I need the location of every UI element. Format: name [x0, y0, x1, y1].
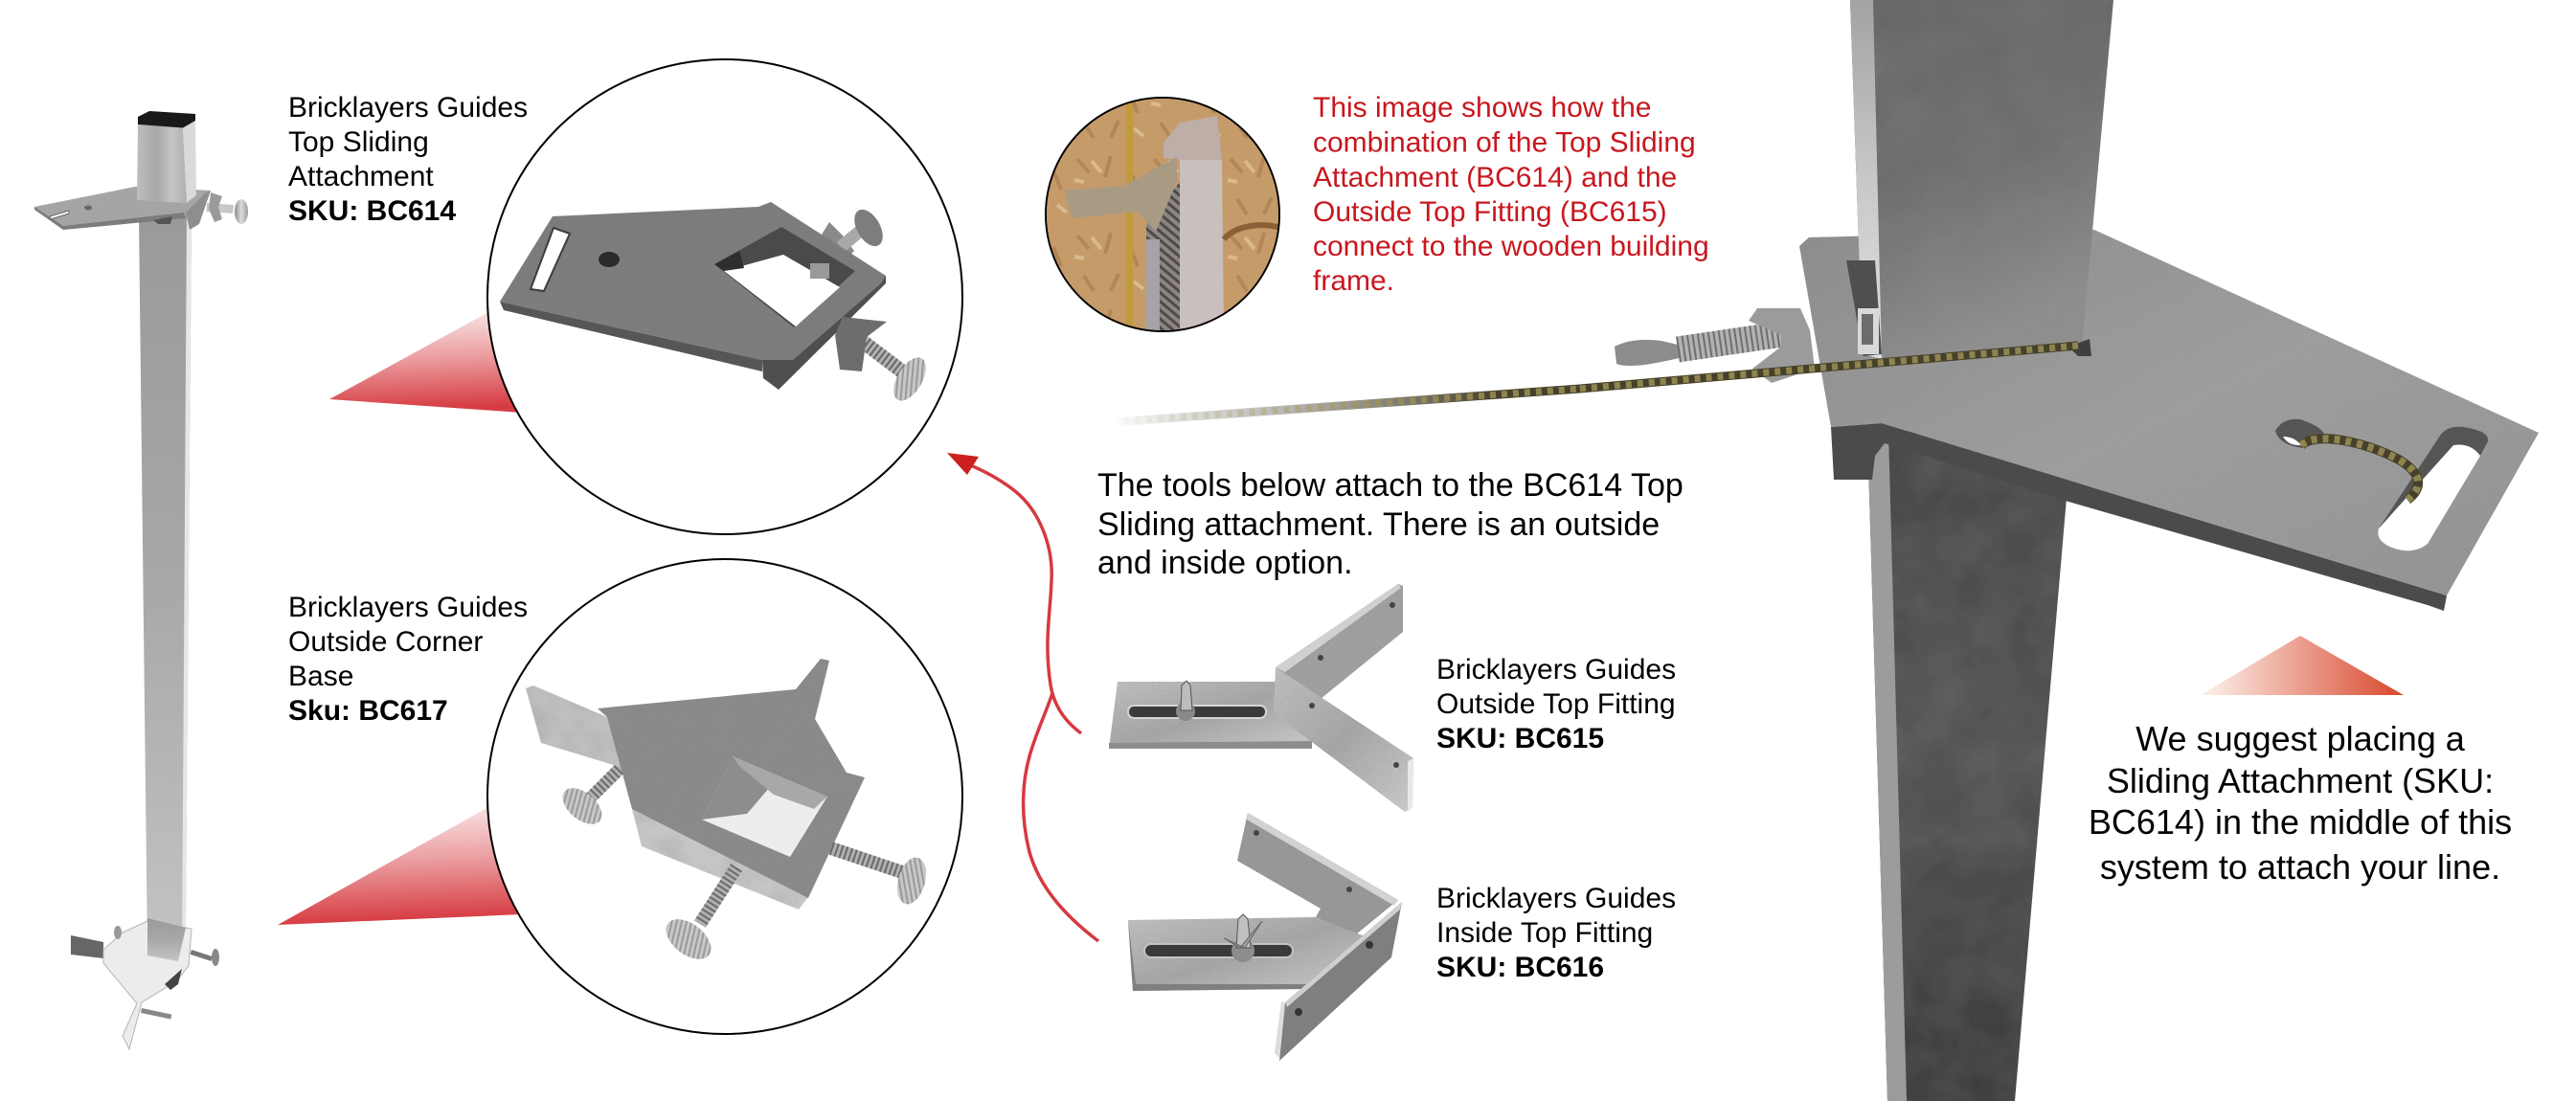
callout circle: BC617 [487, 559, 962, 1034]
pointer: BC614 callout wedge [329, 311, 522, 413]
red explanatory text: combination of the Top Sliding [1313, 126, 1696, 159]
label: BC617: Base [288, 661, 353, 692]
red explanatory text: frame. [1313, 265, 1394, 297]
attachment plate [500, 202, 886, 390]
label: BC614: Bricklayers Guides [288, 92, 528, 124]
label: BC617: Bricklayers Guides [288, 592, 528, 623]
intro text for top fittings: and inside option. [1097, 545, 1353, 581]
label: BC616: Inside Top Fitting [1436, 917, 1653, 949]
left screw [556, 766, 622, 831]
corner base casting [526, 659, 865, 910]
wing screw [206, 192, 248, 224]
label: BC616: SKU: BC616 [1436, 952, 1604, 983]
red explanatory text: This image shows how the [1313, 92, 1651, 124]
product: BC615 outside top fitting [1109, 584, 1413, 812]
outside corner base [71, 918, 219, 1049]
plate round hole [2275, 419, 2325, 448]
slot notch with nut [1846, 260, 2091, 356]
pointer: upward gradient triangle [2201, 636, 2404, 695]
suggestion text: Sliding Attachment (SKU: [2107, 761, 2494, 800]
intro text for top fittings: The tools below attach to the BC614 Top [1097, 467, 1683, 504]
product: BC616 inside top fitting [1128, 813, 1402, 1061]
right screw [831, 848, 931, 908]
suggestion text: system to attach your line. [2100, 847, 2500, 887]
red explanatory text: connect to the wooden building [1313, 231, 1709, 262]
suggestion text: BC614) in the middle of this [2089, 802, 2512, 842]
plate end slot [2378, 427, 2488, 550]
label: BC617: Outside Corner [288, 626, 483, 658]
string line [1112, 346, 2418, 500]
plate underside thickness [1831, 423, 2447, 611]
lower post [1867, 431, 2072, 1101]
label: BC614: Top Sliding [288, 126, 429, 158]
plate surface [1799, 230, 2539, 595]
product: large close-up of sliding attachment on post [1112, 0, 2539, 1101]
label: BC616: Bricklayers Guides [1436, 883, 1676, 914]
bottom screw [659, 867, 736, 967]
upper post [1850, 0, 2113, 359]
red explanatory text: Attachment (BC614) and the [1313, 162, 1677, 193]
bottom screw [835, 317, 933, 406]
label: BC617: Sku: BC617 [288, 695, 448, 727]
product: full guide post with attachments [34, 111, 248, 1049]
top screw [822, 205, 889, 263]
label: BC614: SKU: BC614 [288, 195, 456, 227]
black end cap [138, 111, 195, 128]
photo content [1044, 96, 1283, 335]
intro text for top fittings: Sliding attachment. There is an outside [1097, 506, 1660, 543]
label: BC614: Attachment [288, 161, 434, 192]
callout circle: BC614 [487, 59, 962, 534]
arrow: fittings to BC614 [947, 453, 1098, 941]
post upper section [137, 121, 196, 203]
top sliding attachment plate [34, 187, 211, 230]
label: BC615: Outside Top Fitting [1436, 688, 1676, 720]
label: BC615: SKU: BC615 [1436, 723, 1604, 754]
thumb screw [1615, 308, 1815, 383]
suggestion text: We suggest placing a [2135, 719, 2466, 758]
post lower section [139, 215, 192, 961]
pointer: BC617 callout wedge [278, 806, 523, 925]
label: BC615: Bricklayers Guides [1436, 654, 1676, 685]
installation photo circle [1044, 96, 1283, 335]
red explanatory text: Outside Top Fitting (BC615) [1313, 196, 1667, 228]
